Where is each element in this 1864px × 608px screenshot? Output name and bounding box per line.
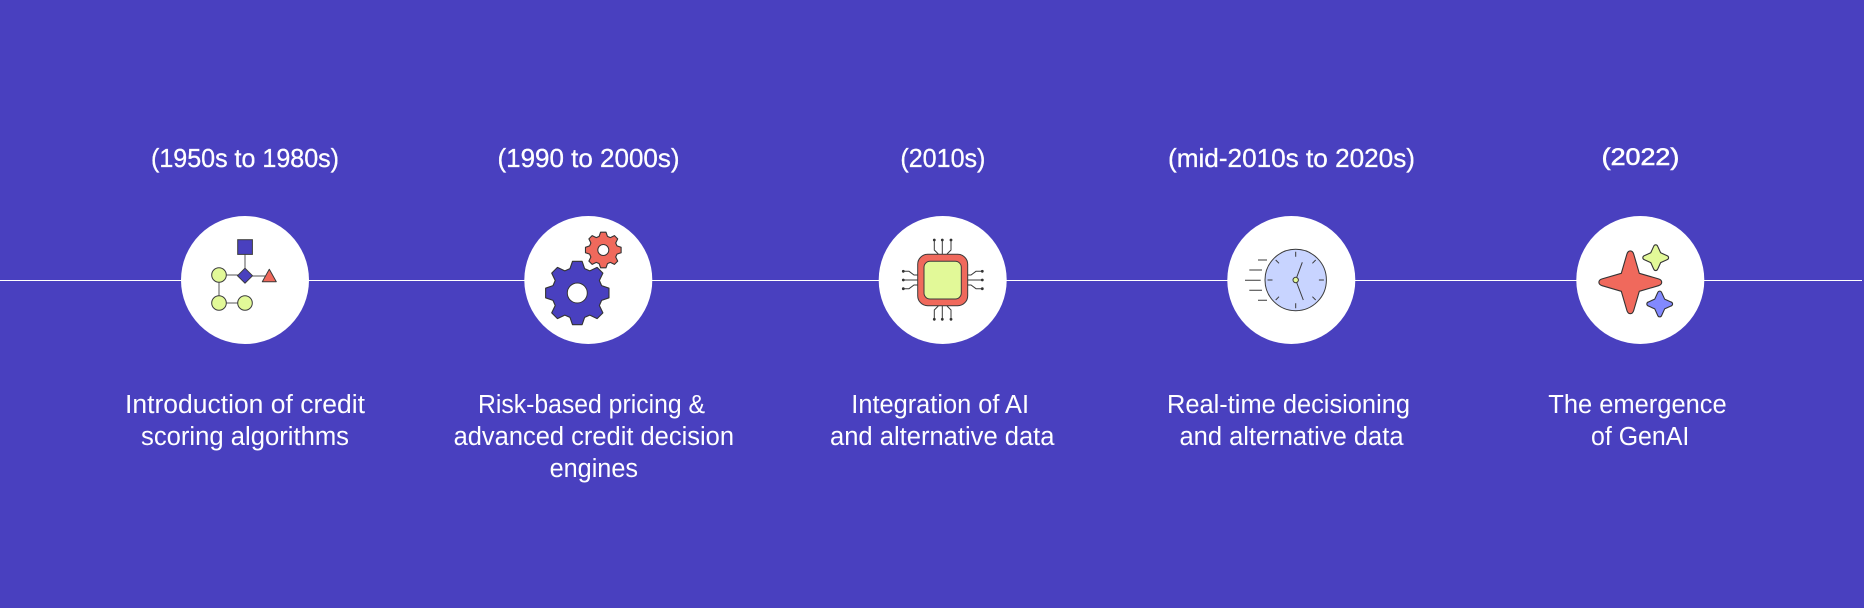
- description: credit scoring: [125, 391, 365, 451]
- panel: 1990 to 2000s: [454, 143, 734, 483]
- description: emergence of GenAI: The emergence: [1548, 391, 1727, 419]
- timeline line: [0, 280, 1862, 281]
- heading: 1990 to 2000s: (1990 to 2000s): [498, 143, 680, 173]
- icon circle: [879, 216, 1007, 344]
- icon: microchip: [902, 239, 984, 321]
- panel: mid-2010s to 2020s: [1167, 143, 1415, 451]
- description: AI and alternative data: Integration of AI: [851, 391, 1029, 419]
- panel: 2022: [1548, 144, 1727, 451]
- description: real-time decisioning: [1167, 391, 1410, 451]
- panel: 1950s to 1980s: [125, 143, 365, 451]
- description: risk-based pricing: engines: [550, 455, 638, 483]
- icon: flow diagram of shapes: [212, 240, 276, 310]
- heading: 1950s to 1980s: (1950s to 1980s): [151, 143, 339, 173]
- description: credit scoring: Introduction of credit: [125, 391, 365, 419]
- icon circle: [1227, 216, 1355, 344]
- description: real-time decisioning: and alternative data: [1180, 423, 1404, 451]
- icon: clock with speed lines: [1245, 249, 1326, 311]
- description: AI and alternative data: and alternative data: [830, 423, 1055, 451]
- description: emergence of GenAI: [1548, 391, 1727, 451]
- heading: 2010s: (2010s): [900, 143, 985, 173]
- panel: 2010s: [830, 143, 1055, 451]
- icon circle: [181, 216, 309, 344]
- description: AI and alternative data: [830, 391, 1055, 451]
- heading: mid-2010s to 2020s: (mid-2010s to 2020s): [1168, 143, 1415, 173]
- heading: 2022: (2022): [1602, 144, 1679, 171]
- icon circle: [1576, 216, 1704, 344]
- description: emergence of GenAI: of GenAI: [1591, 423, 1689, 451]
- description: real-time decisioning: Real-time decisioning: [1167, 391, 1410, 419]
- description: risk-based pricing: Risk-based pricing &: [478, 391, 705, 419]
- description: risk-based pricing: advanced credit decision: [454, 423, 734, 451]
- icon: sparkle stars: [1599, 245, 1673, 317]
- description: risk-based pricing: [454, 391, 734, 483]
- icon: gears: [546, 232, 621, 325]
- icon circle: [524, 216, 652, 344]
- description: credit scoring: scoring algorithms: [141, 423, 349, 451]
